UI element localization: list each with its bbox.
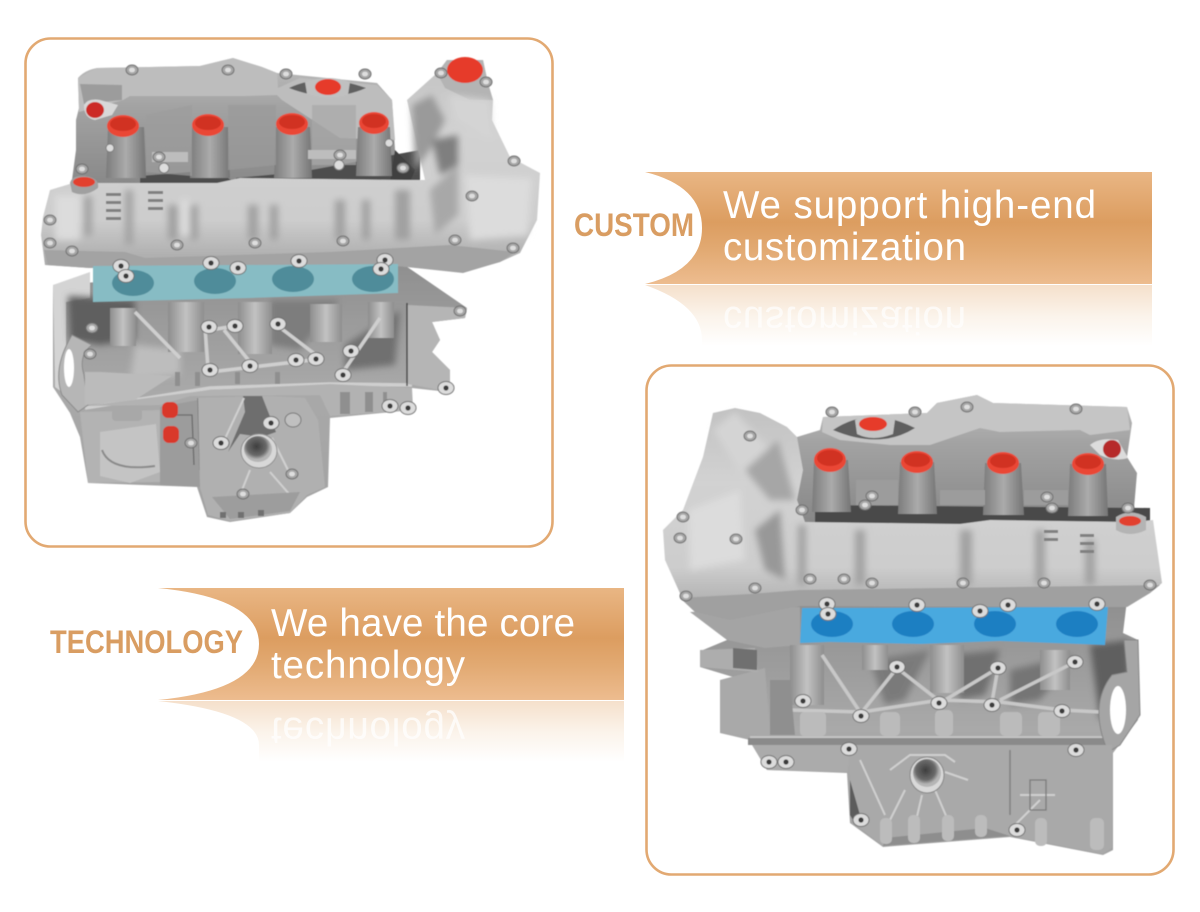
pan and front cover	[160, 400, 203, 487]
engine image: top left, red caps, teal gasket	[41, 57, 540, 522]
panel: engine card top left	[26, 38, 552, 546]
red caps	[814, 448, 846, 472]
engine image: bottom right, red caps, blue gasket	[663, 395, 1162, 855]
right timing ring	[1099, 640, 1140, 752]
banner: custom	[574, 172, 1152, 346]
tagline	[271, 602, 575, 687]
head rear cover	[795, 395, 1137, 530]
orange band	[645, 172, 1152, 284]
intake tubes	[106, 127, 146, 178]
left bulge and front valve cover	[663, 408, 1162, 620]
mirrored tagline: customization	[723, 298, 966, 341]
oil filter housing	[80, 410, 172, 483]
dark recesses	[140, 150, 420, 186]
tagline: We support high-end	[723, 184, 1096, 227]
skirt and left accessory	[752, 745, 850, 772]
teal gasket	[93, 264, 398, 302]
label: TECHNOLOGY	[50, 624, 243, 660]
dark recesses	[815, 505, 1150, 525]
corrugated cylinder walls	[790, 645, 824, 705]
red caps	[107, 115, 139, 137]
reflection	[645, 285, 1152, 346]
blue gasket	[800, 607, 1108, 645]
label: CUSTOM	[574, 207, 694, 243]
tagline: technology	[271, 644, 466, 687]
red oil plugs	[162, 402, 178, 418]
ribs and struts	[750, 655, 1110, 738]
right bulge and front valve cover	[41, 60, 540, 273]
right block ear	[407, 305, 467, 392]
head rear cover	[70, 58, 415, 195]
ribs and struts	[85, 312, 412, 408]
left timing ring	[59, 335, 92, 412]
tagline: customization	[723, 226, 966, 269]
panel: engine card bottom right	[646, 366, 1174, 874]
tagline	[723, 184, 1096, 269]
corrugated cylinder walls	[168, 302, 204, 352]
intake tubes	[812, 460, 851, 512]
lower block	[53, 262, 467, 522]
mirrored tagline: technology	[271, 709, 466, 752]
reflection	[158, 701, 624, 762]
banner: technology	[50, 588, 624, 762]
tagline: We have the core	[271, 602, 575, 645]
oil pan front	[848, 745, 1112, 854]
orange band	[158, 588, 624, 700]
lower block	[697, 600, 1138, 855]
